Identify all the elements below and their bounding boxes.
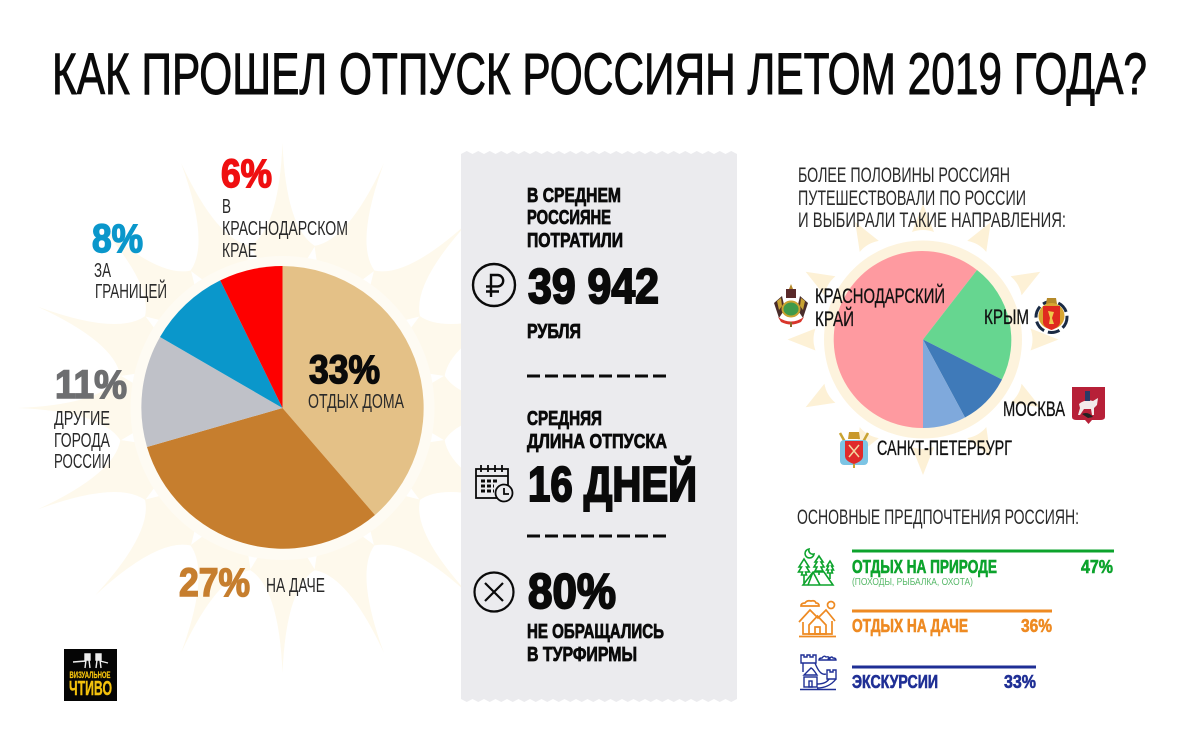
- stat: no travel agencies: [527, 565, 664, 666]
- icon: tent and trees: [798, 549, 834, 585]
- stat: average spend: В СРЕДНЕМ: [527, 185, 621, 207]
- icon: Krasnodar emblem: [774, 284, 808, 327]
- label: 8% abroad: 8%: [92, 217, 143, 261]
- label: Krasnodar region: [815, 284, 945, 331]
- label: 11% other cities: ДРУГИЕ: [54, 408, 110, 430]
- icon: Saint Petersburg emblem: [840, 432, 868, 468]
- label: 33% at home: ОТДЫХ ДОМА: [308, 391, 404, 413]
- stat: no travel agencies: НЕ ОБРАЩАЛИСЬ: [527, 621, 664, 643]
- label: Moscow: МОСКВА: [1003, 398, 1065, 421]
- label: 8% abroad: [92, 217, 167, 303]
- icon: crossed circle: [474, 572, 514, 612]
- icon: fortress wall: [800, 655, 836, 690]
- stat: average spend: РУБЛЯ: [527, 321, 581, 343]
- bar: dacha 36%: ОТДЫХ НА ДАЧЕ: [852, 616, 968, 636]
- pie chart: vacation locations: [141, 266, 424, 549]
- pie chart: destinations: [834, 251, 1011, 428]
- stat: no travel agencies: 80%: [528, 565, 616, 619]
- bar: dacha 36%: 36%: [1021, 616, 1052, 636]
- label: 11% other cities: [54, 363, 127, 473]
- panel: receipt stats: [461, 151, 737, 702]
- icon: country house: [799, 601, 836, 636]
- label: 27% at dacha: НА ДАЧЕ: [266, 575, 325, 597]
- label: Saint Petersburg: САНКТ-ПЕТЕРБУРГ: [877, 437, 1012, 460]
- bar: excursions 33%: ЭКСКУРСИИ: [852, 672, 938, 692]
- text: more than half travelled in Russia: И ВЫБИРАЛИ ТАКИЕ НАПРАВЛЕНИЯ:: [798, 209, 1066, 232]
- stat: average spend: [527, 185, 659, 343]
- bar: nature 47%: 47%: [1081, 557, 1113, 577]
- label: Crimea: КРЫМ: [984, 306, 1029, 329]
- logo: ЧТИВО: [69, 678, 112, 700]
- label: 6% Krasnodar: КРАСНОДАРСКОМ: [222, 218, 348, 240]
- text: more than half travelled in Russia: [798, 164, 1066, 232]
- label: Krasnodar region: КРАЙ: [815, 307, 854, 331]
- icon: Moscow emblem: [1072, 387, 1105, 424]
- bar: excursions 33%: 33%: [1004, 672, 1036, 692]
- bar: nature 47%: (ПОХОДЫ, РЫБАЛКА, ОХОТА): [852, 576, 973, 588]
- text: more than half travelled in Russia: ПУТЕШЕСТВОВАЛИ ПО РОССИИ: [798, 187, 1026, 210]
- label: 6% Krasnodar: [221, 152, 348, 262]
- label: 27% at dacha: [179, 561, 325, 605]
- logo: ВИЗУАЛЬНОЕ: [70, 670, 110, 680]
- stat: average length: 16 ДНЕЙ: [528, 457, 697, 512]
- label: 11% other cities: ГОРОДА: [54, 430, 110, 452]
- label: 6% Krasnodar: КРАЕ: [222, 240, 257, 262]
- icon: Crimea emblem: [1036, 298, 1067, 332]
- stat: average length: СРЕДНЯЯ: [527, 408, 602, 430]
- stat: average spend: 39 942: [528, 260, 659, 314]
- text: more than half travelled in Russia: БОЛЕЕ ПОЛОВИНЫ РОССИЯН: [798, 164, 1010, 187]
- bar: nature 47%: ОТДЫХ НА ПРИРОДЕ: [852, 557, 997, 577]
- label: 11% other cities: РОССИИ: [54, 451, 111, 473]
- label: 8% abroad: ЗА: [94, 260, 111, 282]
- stat: average spend: ПОТРАТИЛИ: [527, 230, 623, 252]
- stat: average length: ДЛИНА ОТПУСКА: [527, 431, 667, 453]
- stat: average length: [527, 408, 697, 512]
- label: 6% Krasnodar: 6%: [221, 152, 272, 196]
- label: 33% at home: 33%: [309, 348, 380, 392]
- label: 8% abroad: ГРАНИЦЕЙ: [95, 279, 167, 303]
- sun background: right: [788, 204, 1058, 475]
- stat: average spend: РОССИЯНЕ: [527, 207, 611, 229]
- icon: calendar with clock: [476, 465, 512, 502]
- label: 11% other cities: 11%: [55, 363, 127, 407]
- label: 6% Krasnodar: В: [222, 196, 231, 218]
- logo: [64, 649, 117, 701]
- label: Krasnodar region: КРАСНОДАРСКИЙ: [815, 284, 945, 308]
- label: 27% at dacha: 27%: [179, 561, 250, 605]
- bar: excursions 33%: [852, 666, 1036, 692]
- label: 33% at home: [308, 348, 404, 413]
- bar: dacha 36%: [852, 610, 1052, 636]
- stat: no travel agencies: В ТУРФИРМЫ: [527, 644, 637, 666]
- sun background: left: [18, 143, 548, 673]
- icon: ruble: [473, 264, 515, 306]
- bar: nature 47%: [852, 550, 1114, 588]
